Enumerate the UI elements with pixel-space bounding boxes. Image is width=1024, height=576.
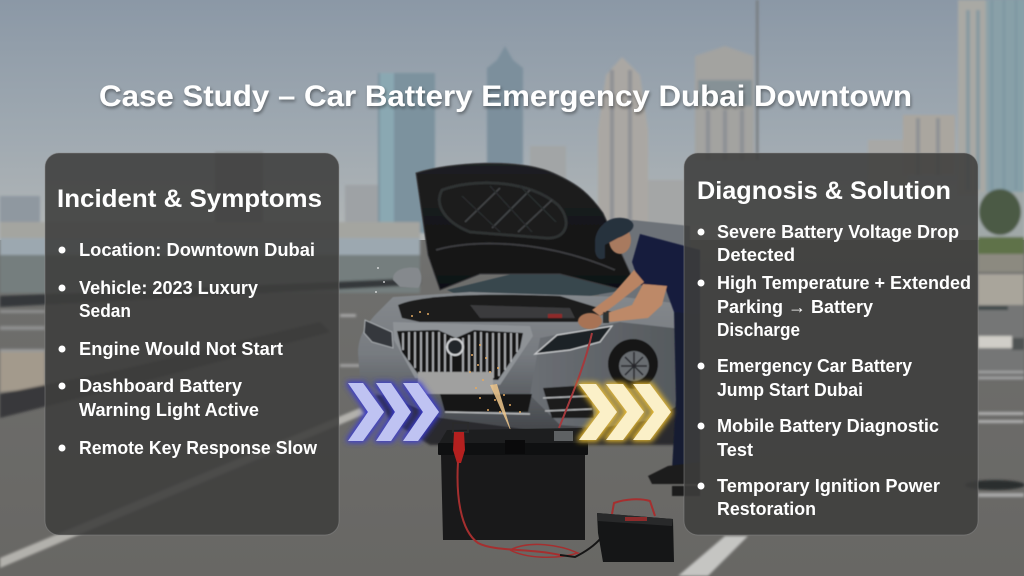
bullet list: symptoms: Engine Would Not Start xyxy=(79,339,283,359)
sparks xyxy=(375,267,521,437)
bullet list: solution: Mobile Battery Diagnostic xyxy=(717,416,939,436)
bullet list: solution: Restoration xyxy=(717,499,816,519)
heading: diagnosis and solution: Diagnosis & Solution xyxy=(697,177,951,205)
near arm xyxy=(604,284,667,322)
bullet list: symptoms xyxy=(58,240,318,458)
face xyxy=(609,226,631,254)
panel: incident and symptoms xyxy=(45,153,339,535)
bullet list: symptoms: Location: Downtown Dubai xyxy=(79,240,315,260)
car with open hood xyxy=(358,163,690,430)
grille surround xyxy=(393,322,533,385)
arrows: yellow chevrons xyxy=(579,384,671,440)
open hood xyxy=(416,163,632,290)
grille xyxy=(397,330,523,380)
car roof behind technician xyxy=(590,220,690,330)
handle xyxy=(612,499,655,516)
heading: incident and symptoms: Incident & Symptoms xyxy=(57,185,322,213)
bullet list: solution: Parking → Battery xyxy=(717,297,873,317)
small booster battery xyxy=(597,499,674,562)
legs xyxy=(672,310,700,470)
watch xyxy=(603,312,609,323)
main battery xyxy=(438,423,588,540)
bullet list: solution: Detected xyxy=(717,245,795,265)
side mirror xyxy=(393,268,421,288)
licence plate xyxy=(418,372,493,394)
bullet list: solution: Test xyxy=(717,440,753,460)
bullet list: symptoms: Warning Light Active xyxy=(79,400,259,420)
panel: diagnosis and solution xyxy=(684,153,978,535)
bullet list: symptoms: Vehicle: 2023 Luxury xyxy=(79,278,258,298)
boots xyxy=(648,462,700,496)
jumper cable to car xyxy=(559,333,592,428)
ground shadow under car xyxy=(375,395,690,445)
bullet list: solution xyxy=(698,222,971,519)
arrows: blue chevrons xyxy=(348,383,439,441)
technician xyxy=(578,218,700,496)
bullet list: solution: Discharge xyxy=(717,320,800,340)
clamp handle xyxy=(453,423,468,432)
right intake xyxy=(543,385,594,418)
title: Case Study – Car Battery Emergency Dubai Downtown xyxy=(99,80,912,113)
terminal xyxy=(554,431,573,441)
bullet list: symptoms: Sedan xyxy=(79,301,131,321)
wheel xyxy=(608,339,658,389)
hands xyxy=(578,313,602,329)
red clamp xyxy=(453,432,465,463)
bullet list: symptoms: Dashboard Battery xyxy=(79,376,242,396)
bullet list: solution: Emergency Car Battery xyxy=(717,356,912,376)
windshield xyxy=(447,272,625,296)
bullet list: symptoms: Remote Key Response Slow xyxy=(79,438,318,458)
cap xyxy=(595,218,633,259)
engine bay xyxy=(398,295,612,322)
bullet list: solution: High Temperature + Extended xyxy=(717,273,971,293)
bullet list: solution: Jump Start Dubai xyxy=(717,380,863,400)
bullet list: solution: Temporary Ignition Power xyxy=(717,476,940,496)
cable on ground xyxy=(458,462,601,557)
shirt xyxy=(632,234,700,314)
bullet list: solution: Severe Battery Voltage Drop xyxy=(717,222,959,242)
far arm xyxy=(592,270,644,316)
lower intake xyxy=(440,394,532,412)
badge xyxy=(447,339,463,355)
headlights xyxy=(364,320,393,348)
right side panel xyxy=(530,322,690,428)
car body xyxy=(358,292,690,430)
